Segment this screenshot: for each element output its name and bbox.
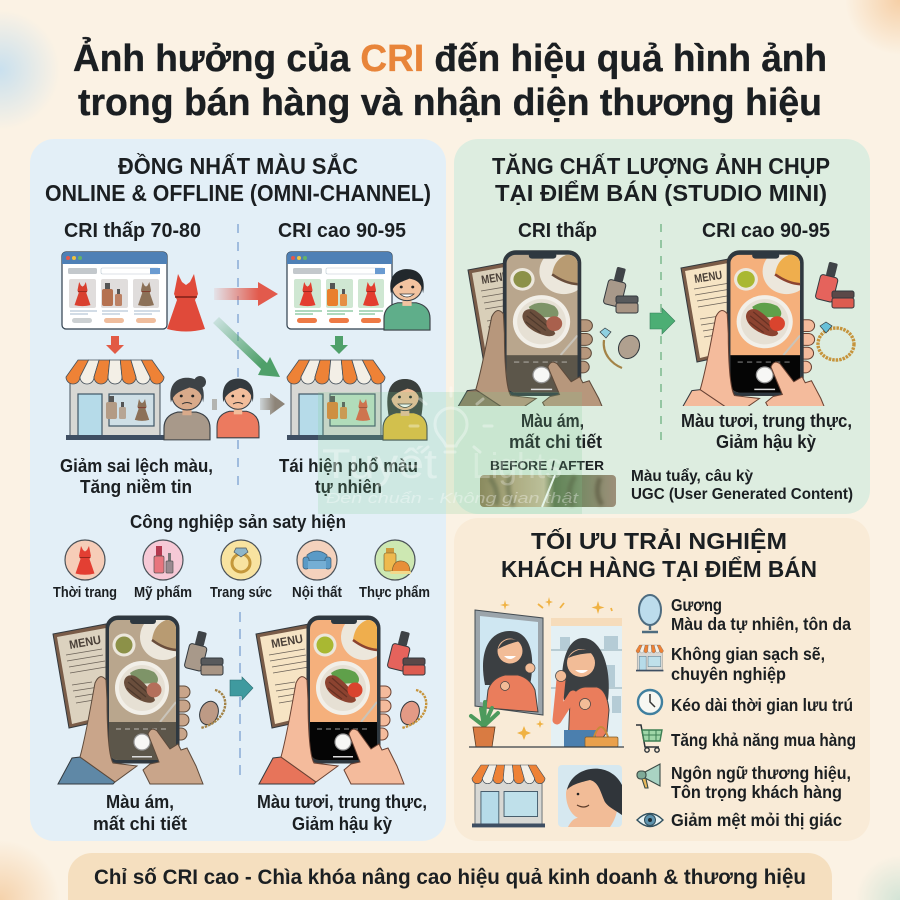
text: clean space: chuyên nghiệp: [671, 664, 786, 684]
watermark: [318, 388, 582, 514]
note: UGC: [631, 467, 853, 503]
arrow: grey to store: [260, 393, 285, 415]
panel heading: [45, 152, 431, 206]
caption: muted photo: [93, 791, 187, 834]
caption: high CRI: Tái hiện phổ màu: [279, 455, 418, 476]
caption: muted photo: Màu ám,: [521, 410, 584, 431]
arrow: green: [650, 308, 675, 334]
caption: muted photo: Màu ám,: [106, 791, 174, 812]
panel heading: ONLINE & OFFLINE (OMNI-CHANNEL): [45, 180, 431, 206]
watermark: Tuyết: [322, 440, 437, 487]
caption: low CRI: [60, 455, 213, 497]
title: Ảnh hưởng của CRI đến hiệu quả hình ảnh: [73, 36, 827, 80]
panel: photo quality at point of sale: [452, 139, 870, 514]
column label: high CRI: CRI cao 90-95: [702, 220, 830, 242]
text: mirror: Gương: [671, 595, 722, 615]
phone scene: vivid colours: MENU: [270, 632, 304, 651]
arrow: green diagonal: [213, 317, 280, 377]
arrow: red gradient to right: [214, 282, 278, 306]
caption: vivid photo: Giảm hậu kỳ: [716, 431, 817, 452]
industry: food: Thực phẩm: [359, 584, 430, 601]
before and after photo strip: [480, 475, 616, 507]
column label: high CRI: CRI cao 90-95: [278, 220, 406, 242]
footer text: Chỉ số CRI cao - Chìa khóa nâng cao hiệu quả kinh doanh & thương hiệu: [94, 865, 806, 889]
watermark: Đen chuẩn - Không gian thật: [326, 490, 579, 507]
industry: cosmetics: Mỹ phẩm: [134, 584, 192, 601]
text: clean space: [671, 644, 825, 684]
note: UGC: UGC (User Generated Content): [631, 486, 853, 503]
industry: jewellery: Trang sức: [210, 584, 272, 601]
text: longer stay: Kéo dài thời gian lưu trú: [671, 695, 853, 715]
illustration: small store: [472, 765, 545, 827]
illustration: customer portrait: [558, 765, 622, 827]
phone scene: muted colours: [53, 614, 225, 784]
before and after label: BEFORE / AFTER: [490, 459, 604, 473]
caption: vivid photo: Màu tươi, trung thực,: [257, 791, 427, 812]
industry: fashion: Thời trang: [53, 584, 117, 601]
text: mirror: Màu da tự nhiên, tôn da: [671, 614, 851, 634]
caption: low CRI: Tăng niềm tin: [80, 476, 192, 497]
text: mirror: [671, 595, 851, 634]
caption: vivid photo: [681, 410, 852, 452]
panel heading: [501, 526, 817, 582]
subheading: industries: Công nghiệp sản saty hiện: [130, 512, 346, 532]
caption: high CRI: [279, 455, 418, 497]
arrow: green down: [330, 336, 348, 354]
icon: mirror: [639, 595, 661, 632]
text: less eye strain: Giảm mệt mỏi thị giác: [671, 810, 842, 830]
caption: high CRI: tự nhiên: [315, 476, 382, 497]
arrow: grey stub: [212, 399, 217, 410]
watermark: Lights: [472, 445, 562, 486]
panel heading: TỐI ƯU TRẢI NGHIỆM: [531, 526, 787, 554]
text: brand language: Tôn trọng khách hàng: [671, 782, 842, 802]
icon: megaphone: [637, 764, 660, 788]
panel heading: TĂNG CHẤT LƯỢNG ẢNH CHỤP: [492, 151, 830, 179]
column label: low CRI: CRI thấp: [518, 220, 597, 242]
phone scene: vivid colours: MENU: [693, 268, 723, 286]
icon: clock: [638, 690, 662, 714]
title: trong bán hàng và nhận diện thương hiệu: [78, 82, 822, 124]
store: low CRI: [66, 360, 164, 440]
caption: low CRI: Giảm sai lệch màu,: [60, 455, 213, 476]
phone scene: muted colours: [458, 250, 640, 406]
column label: low CRI: CRI thấp 70-80: [64, 220, 201, 242]
text: purchase likelihood: Tăng khả năng mua hàng: [671, 730, 856, 750]
panel heading: ĐỒNG NHẤT MÀU SẮC: [118, 152, 358, 179]
industry: cosmetics: [134, 540, 192, 601]
panel heading: KHÁCH HÀNG TẠI ĐIỂM BÁN: [501, 555, 817, 582]
icon: store: [636, 645, 663, 671]
person: happy woman in yellow: [383, 379, 427, 440]
text: brand language: [671, 763, 851, 802]
arrow: red down: [106, 336, 124, 354]
phone scene: vivid colours: [256, 614, 426, 784]
browser: low CRI shop: [62, 252, 167, 329]
phone scene: muted colours: MENU: [68, 633, 102, 652]
browser: high CRI shop: [287, 252, 392, 329]
caption: muted photo: mất chi tiết: [93, 813, 187, 834]
note: UGC: Màu tuẩy, câu kỳ: [631, 467, 753, 485]
caption: vivid photo: Giảm hậu kỳ: [292, 813, 393, 834]
icon: shopping cart: [636, 725, 662, 752]
panel heading: TẠI ĐIỂM BÁN (STUDIO MINI): [495, 179, 827, 206]
phone scene: muted colours: MENU: [480, 269, 510, 287]
illustration: woman at mirror: [469, 597, 624, 747]
industry: fashion: [53, 540, 117, 601]
industry: jewellery: [210, 540, 272, 601]
person: smiling man: [384, 269, 430, 330]
caption: vivid photo: Màu tươi, trung thực,: [681, 410, 852, 431]
footer banner: [68, 853, 832, 900]
panel: customer experience: [454, 518, 870, 841]
caption: muted photo: [509, 410, 602, 452]
text: clean space: Không gian sạch sẽ,: [671, 644, 825, 664]
industry: food: [359, 540, 430, 601]
title: [73, 36, 827, 124]
industry: furniture: Nội thất: [292, 584, 342, 601]
text: brand language: Ngôn ngữ thương hiệu,: [671, 763, 851, 783]
phone scene: vivid colours: [677, 249, 854, 416]
caption: muted photo: mất chi tiết: [509, 431, 602, 452]
caption: vivid photo: [257, 791, 427, 834]
panel heading: [492, 151, 830, 206]
icon: red dress: [167, 274, 205, 332]
panel: colour consistency online and offline: [30, 139, 446, 841]
person: unhappy woman: [164, 376, 210, 440]
arrow: teal: [230, 677, 253, 700]
icon: eye: [637, 814, 663, 826]
store: high CRI: [287, 360, 385, 440]
industry: furniture: [292, 540, 342, 601]
person: unhappy woman in coral top: [217, 379, 259, 438]
